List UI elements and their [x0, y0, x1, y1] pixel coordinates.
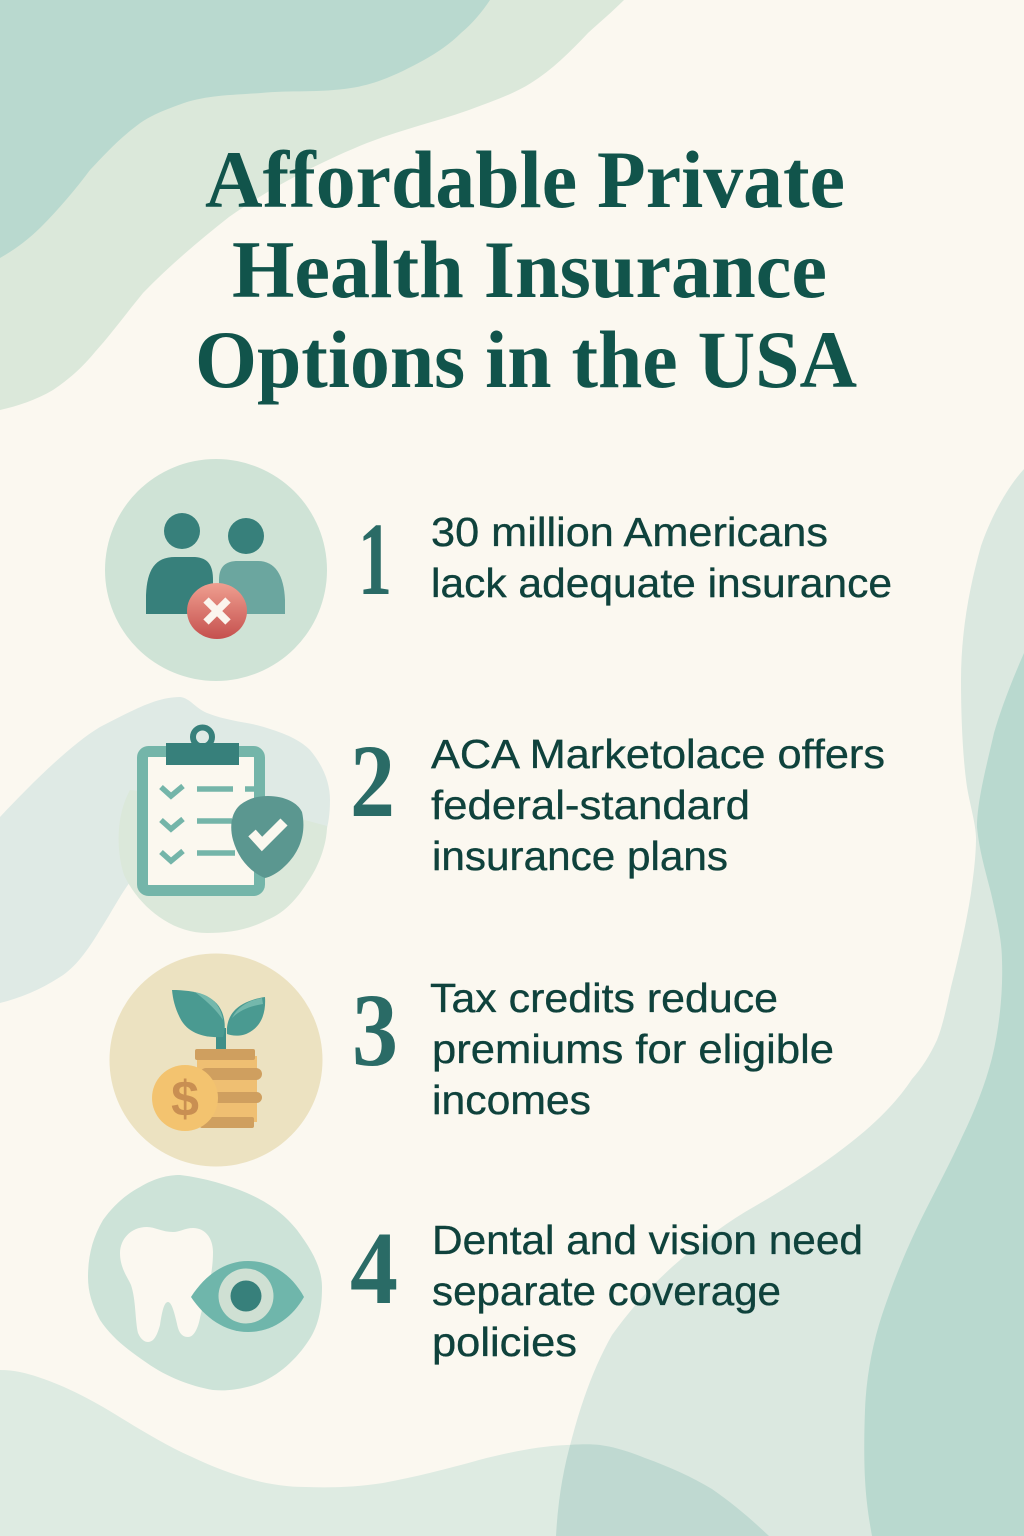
text: item 2: [431, 731, 885, 879]
text: item 4: Dental and vision need: [432, 1217, 863, 1263]
item 3: tax credits: [110, 954, 834, 1166]
text: item 1: [431, 509, 892, 606]
text: item 2: ACA Marketolace offers: [431, 731, 885, 777]
text: item 1: 30 million Americans: [431, 509, 828, 555]
icon: coins with seedling: [110, 954, 322, 1166]
text: item 4: policies: [432, 1319, 577, 1365]
icon: two people with red cross: [105, 459, 327, 681]
text: item 1: lack adequate insurance: [431, 560, 892, 606]
text: item 2: federal-standard: [431, 782, 750, 828]
text: item 2: insurance plans: [432, 833, 728, 879]
title: Health Insurance: [232, 224, 827, 315]
icon: tooth and eye: [88, 1175, 322, 1390]
title: Options in the USA: [195, 314, 857, 405]
text: item 3: Tax credits reduce: [430, 975, 778, 1021]
icon: clipboard with shield: [142, 728, 303, 890]
text: item 4: [432, 1217, 863, 1365]
item 1: uninsured Americans: [105, 459, 892, 681]
text: item 3: [430, 975, 834, 1123]
number 4: 4: [350, 1211, 398, 1326]
text: item 3: premiums for eligible: [432, 1026, 834, 1072]
text: item 4: separate coverage: [432, 1268, 781, 1314]
text: item 3: incomes: [432, 1077, 591, 1123]
item 4: dental and vision: [88, 1175, 863, 1390]
item 2: ACA Marketplace: [142, 724, 885, 890]
title: [195, 134, 857, 405]
number 1: 1: [358, 502, 392, 617]
number 2: 2: [350, 724, 395, 839]
number 3: 3: [352, 973, 398, 1088]
title: Affordable Private: [205, 134, 845, 225]
icon: coins with seedling: $: [171, 1071, 199, 1127]
